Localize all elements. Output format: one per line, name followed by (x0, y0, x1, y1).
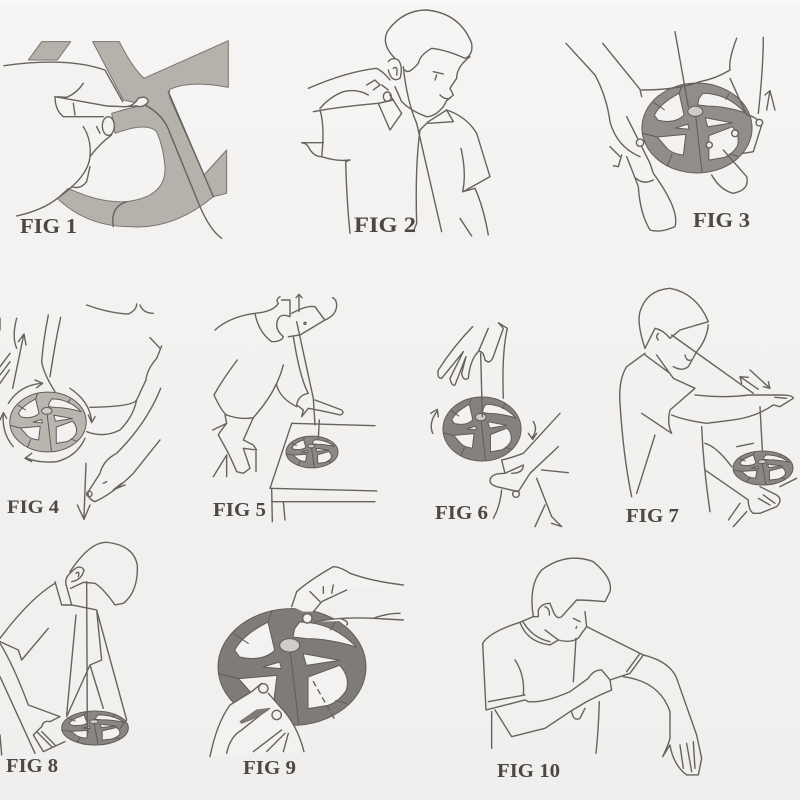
panel: figure 8 (0, 542, 137, 777)
label: FIG 4: FIG 4 (7, 497, 60, 518)
wheel (10, 392, 86, 452)
drawing: body, hand and rotation arrows (0, 304, 162, 519)
wheel (642, 83, 752, 173)
panel: figure 3 (566, 32, 775, 232)
panel: figure 9 (210, 567, 403, 779)
panel: figure 10 (483, 558, 702, 782)
wheel (733, 451, 793, 485)
panel: figure 7 (620, 288, 797, 527)
label: FIG 8: FIG 8 (6, 755, 58, 777)
drawing: boy with arm raised (483, 558, 702, 775)
label: FIG 7: FIG 7 (626, 505, 679, 527)
drawing: man leaning over table (213, 294, 377, 522)
panel: figure 2 (302, 10, 490, 237)
drawing: two hands and wheel (431, 323, 568, 527)
panel: figure 5 (213, 294, 377, 522)
wheel (443, 397, 521, 461)
drawing: boy holding thread at ear (302, 10, 490, 236)
label: FIG 6: FIG 6 (435, 502, 488, 524)
label: FIG 3: FIG 3 (693, 208, 750, 232)
panel: figure 4 (0, 304, 162, 519)
wheel (62, 711, 128, 745)
label: FIG 1: FIG 1 (20, 214, 77, 238)
drawing: wheel held by hand (0, 41, 228, 238)
wheel (218, 609, 366, 725)
drawing: hands holding large wheel (210, 567, 403, 757)
label: FIG 2: FIG 2 (354, 212, 416, 237)
label: FIG 5: FIG 5 (213, 499, 266, 521)
panel: figure 1 (0, 41, 228, 238)
drawing: two hands rotating wheel (566, 32, 775, 231)
panel: figure 6 (431, 323, 568, 527)
label: FIG 9: FIG 9 (243, 757, 296, 779)
drawing: boy with outstretched arm (620, 288, 797, 527)
drawing: boy looking down at wheel (0, 542, 137, 755)
wheel (286, 436, 338, 468)
label: FIG 10: FIG 10 (497, 760, 560, 782)
